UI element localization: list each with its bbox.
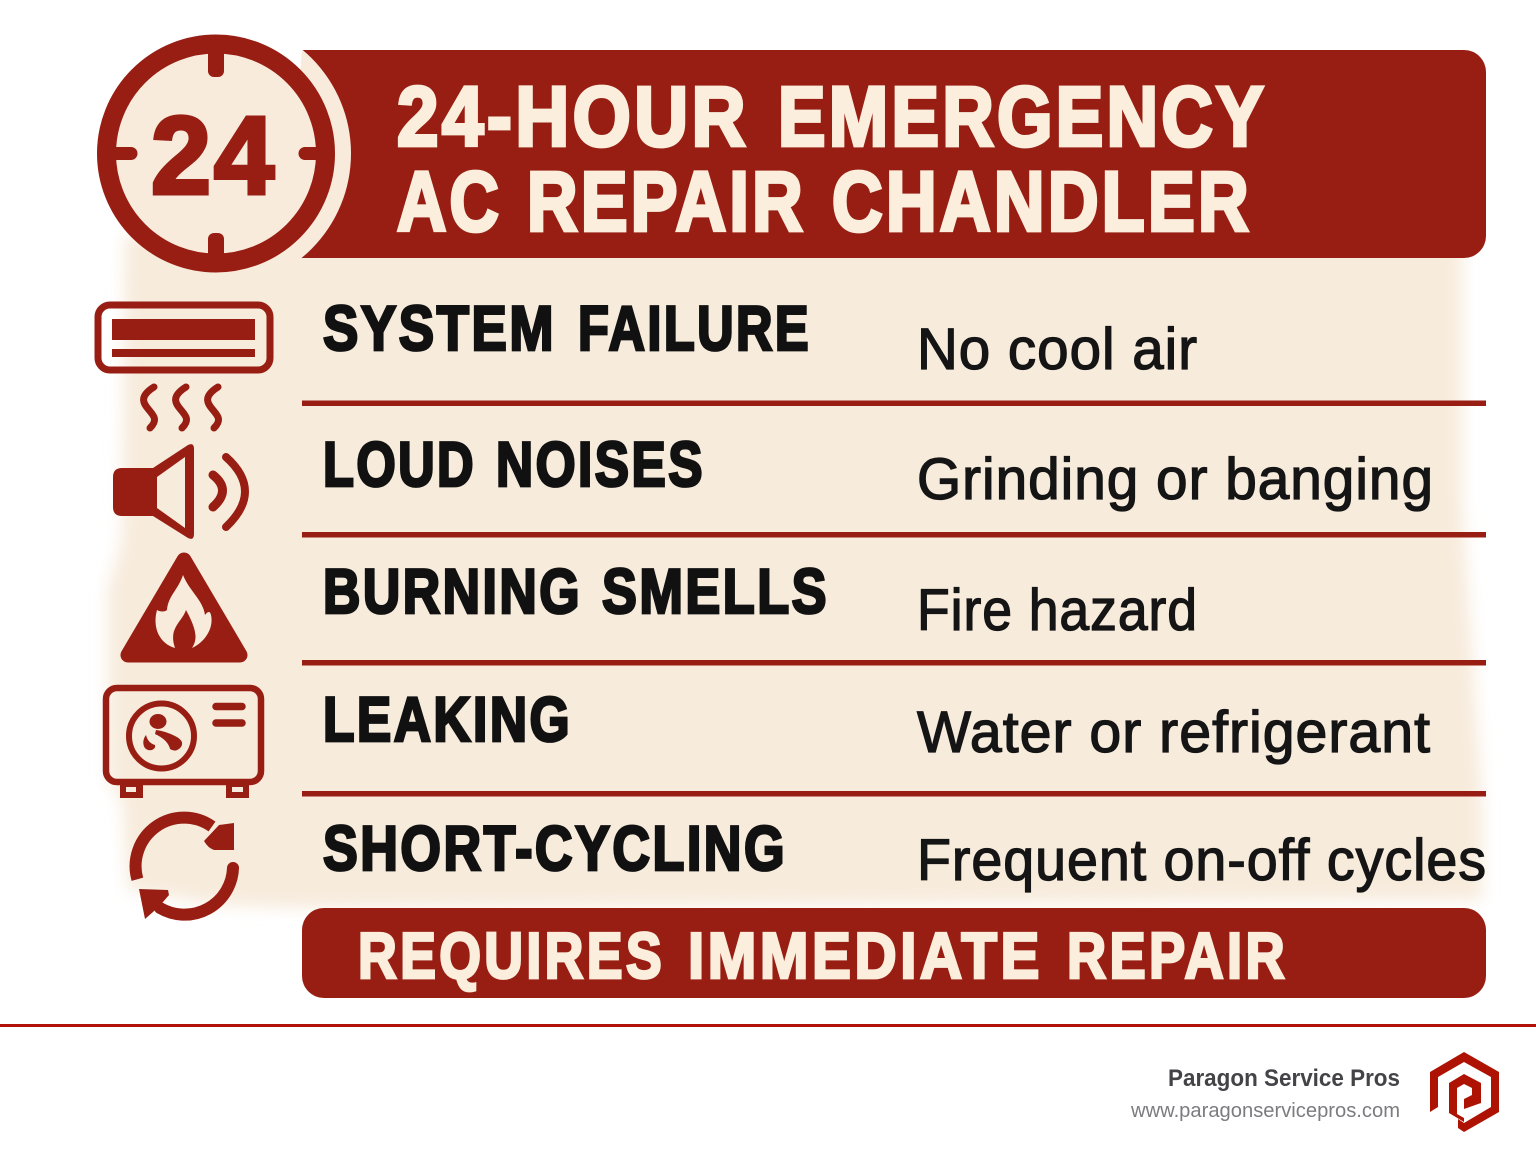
row: short-cycling: SHORT-CYCLING [323,814,787,884]
row: system failure [323,294,1198,382]
row: system failure: FAILURE [578,294,811,364]
row: loud noises: Grinding or banging [917,447,1434,512]
row: loud noises: LOUD [323,430,476,500]
header banner [299,50,1486,258]
icon: cycling arrows [136,818,234,919]
row: leaking [323,685,1431,765]
title [397,70,1267,248]
row: short-cycling: Frequent on-off cycles [917,828,1487,893]
row: loud noises [323,430,1434,512]
footer company text: Paragon Service Pros [1168,1065,1400,1092]
callout: requires immediate repair: IMMEDIATE [688,919,1043,992]
row: burning smells: Fire hazard [917,578,1198,643]
footer company text: www.paragonservicepros.com [1130,1100,1400,1122]
row: loud noises: NOISES [496,430,705,500]
icon: speaker [113,444,245,539]
title: CHANDLER [832,154,1252,248]
callout: requires immediate repair [302,908,1486,998]
footer company text [1130,1065,1400,1122]
row: burning smells: SMELLS [602,557,829,627]
row: burning smells: BURNING [323,557,582,627]
icon: wall AC unit with heat waves [98,305,270,428]
title: EMERGENCY [778,70,1267,164]
icon: outdoor condenser unit [106,688,261,798]
panel: cream background [108,235,1482,908]
row: leaking: LEAKING [323,685,572,755]
row: short-cycling [323,814,1487,893]
row: leaking: Water or refrigerant [917,700,1431,765]
title: REPAIR [527,154,806,248]
row: burning smells [323,557,1198,643]
icon: 24-hour clock: 24 [151,94,277,218]
icon: 24-hour clock [97,34,351,272]
title: 24-HOUR [397,70,749,164]
row: system failure: SYSTEM [323,294,556,364]
callout: requires immediate repair: REQUIRES [358,919,665,992]
footer divider [0,1024,1536,1027]
title: AC [397,154,502,248]
icon: fire warning triangle [128,560,240,655]
row: system failure: No cool air [917,317,1198,382]
logo: Paragon hexagon [1430,1052,1499,1132]
callout: requires immediate repair: REPAIR [1067,919,1288,992]
